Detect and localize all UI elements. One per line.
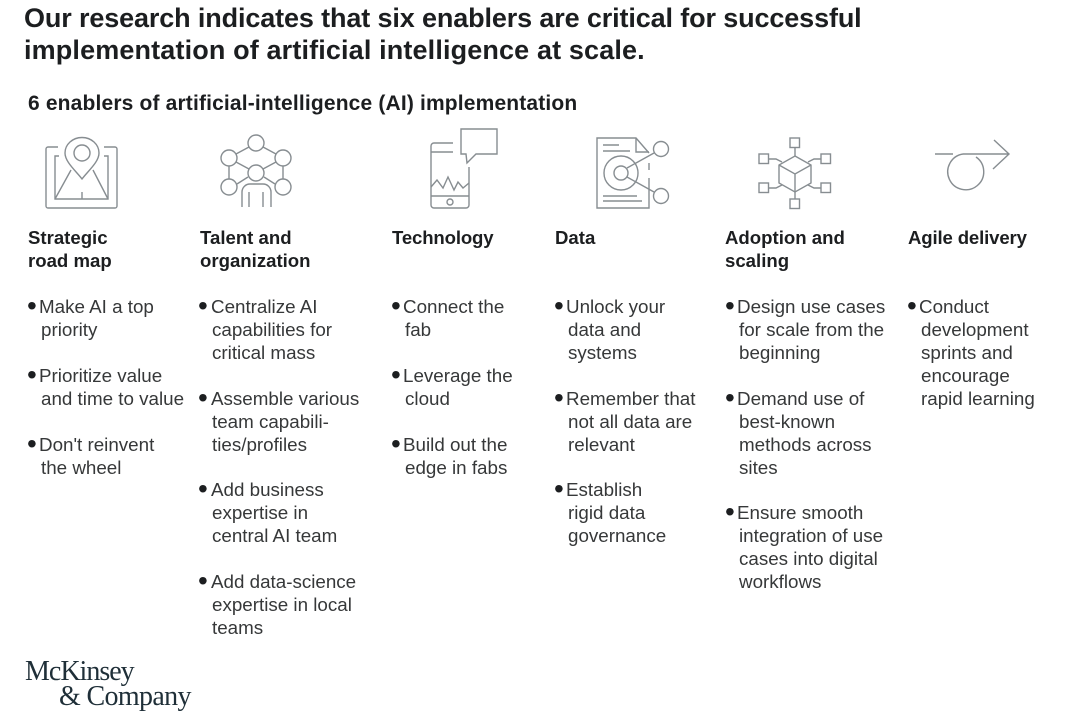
- column: data: [554, 227, 696, 546]
- column: adoption and scaling: [725, 227, 885, 592]
- subtitle: 6 enablers of artificial-intelligence (AI) implementation: [28, 92, 577, 115]
- heading: Technology: [392, 227, 493, 248]
- bullet: data and: [568, 319, 641, 340]
- bullet: Add data-science: [211, 571, 356, 592]
- bullet: encourage: [921, 365, 1010, 386]
- bullet: governance: [568, 525, 666, 546]
- bullet: Leverage the: [403, 365, 513, 386]
- bullet: •: [27, 359, 37, 390]
- bullet: Design use cases: [737, 296, 885, 317]
- bullet: edge in fabs: [405, 457, 507, 478]
- heading: Adoption and: [725, 227, 845, 248]
- icon: phone with chart and speech bubble: [431, 129, 497, 208]
- bullet: systems: [568, 342, 637, 363]
- bullet: fab: [405, 319, 431, 340]
- icon: map with pin: [46, 138, 117, 208]
- title: [24, 2, 862, 64]
- bullet: cases into digital: [739, 548, 878, 569]
- heading: Strategic: [28, 227, 108, 248]
- bullet: [198, 565, 356, 638]
- bullet: [198, 290, 332, 363]
- bullet: methods across: [739, 434, 872, 455]
- bullet: [198, 382, 359, 455]
- bullet: Build out the: [403, 434, 507, 455]
- bullet: Conduct: [919, 296, 989, 317]
- heading: Talent and: [200, 227, 292, 248]
- bullet: critical mass: [212, 342, 315, 363]
- bullet: development: [921, 319, 1029, 340]
- bullet: •: [198, 473, 208, 504]
- logo: [25, 656, 192, 712]
- bullet: •: [391, 290, 401, 321]
- bullet: and time to value: [41, 388, 184, 409]
- icon: talent network with person: [221, 135, 291, 207]
- bullet: [198, 473, 337, 546]
- bullet: expertise in: [212, 502, 308, 523]
- bullet: •: [725, 290, 735, 321]
- bullet: Prioritize value: [39, 365, 162, 386]
- bullet: •: [198, 382, 208, 413]
- heading: [200, 227, 311, 271]
- bullet: Ensure smooth: [737, 502, 863, 523]
- bullet: integration of use: [739, 525, 883, 546]
- bullet: Assemble various: [211, 388, 359, 409]
- bullet: [27, 290, 154, 340]
- heading: scaling: [725, 250, 789, 271]
- bullet: Establish: [566, 479, 642, 500]
- heading: [28, 227, 112, 271]
- bullet: teams: [212, 617, 263, 638]
- bullet: •: [907, 290, 917, 321]
- column: strategic road map: [27, 227, 184, 478]
- logo: McKinsey: [25, 656, 134, 687]
- bullet: •: [27, 290, 37, 321]
- column: agile delivery: [907, 227, 1035, 409]
- bullet: beginning: [739, 342, 820, 363]
- bullet: •: [554, 473, 564, 504]
- bullet: rigid data: [568, 502, 645, 523]
- bullet: [27, 359, 184, 409]
- bullet: •: [198, 290, 208, 321]
- bullet: •: [198, 565, 208, 596]
- bullet: •: [554, 382, 564, 413]
- bullet: Remember that: [566, 388, 695, 409]
- title: Our research indicates that six enablers are critical for successful: [24, 2, 862, 32]
- bullet: rapid learning: [921, 388, 1035, 409]
- bullet: •: [391, 428, 401, 459]
- bullet: [391, 428, 507, 478]
- bullet: not all data are: [568, 411, 692, 432]
- bullet: the wheel: [41, 457, 121, 478]
- bullet: •: [391, 359, 401, 390]
- bullet: for scale from the: [739, 319, 884, 340]
- bullet: best-known: [739, 411, 835, 432]
- bullet: [725, 290, 885, 363]
- column: technology: [391, 227, 513, 478]
- bullet: Unlock your: [566, 296, 665, 317]
- bullet: cloud: [405, 388, 450, 409]
- bullet: [725, 382, 872, 478]
- bullet: Centralize AI: [211, 296, 317, 317]
- heading: Agile delivery: [908, 227, 1027, 248]
- logo: & Company: [59, 681, 191, 712]
- bullet: [27, 428, 154, 478]
- bullet: [554, 382, 696, 455]
- icon: hexagonal cube with nodes: [759, 138, 830, 208]
- bullet: [907, 290, 1035, 409]
- column: talent and organization: [198, 227, 359, 638]
- icon: loop arrow: [935, 140, 1009, 190]
- bullet: [554, 473, 666, 546]
- title: implementation of artificial intelligence at scale.: [24, 34, 645, 64]
- bullet: central AI team: [212, 525, 337, 546]
- bullet: ties/profiles: [212, 434, 307, 455]
- bullet: team capabili-: [212, 411, 329, 432]
- heading: Data: [555, 227, 595, 248]
- bullet: Connect the: [403, 296, 504, 317]
- bullet: [554, 290, 665, 363]
- bullet: [391, 290, 504, 340]
- heading: organization: [200, 250, 311, 271]
- bullet: Make AI a top: [39, 296, 154, 317]
- bullet: workflows: [739, 571, 821, 592]
- bullet: Add business: [211, 479, 324, 500]
- bullet: [391, 359, 513, 409]
- bullet: •: [725, 496, 735, 527]
- bullet: •: [27, 428, 37, 459]
- bullet: •: [725, 382, 735, 413]
- bullet: priority: [41, 319, 97, 340]
- bullet: sites: [739, 457, 778, 478]
- bullet: Demand use of: [737, 388, 864, 409]
- heading: [725, 227, 845, 271]
- icon: document with target and nodes: [597, 138, 668, 208]
- bullet: expertise in local: [212, 594, 352, 615]
- heading: road map: [28, 250, 112, 271]
- bullet: sprints and: [921, 342, 1013, 363]
- bullet: Don't reinvent: [39, 434, 154, 455]
- bullet: capabilities for: [212, 319, 332, 340]
- bullet: [725, 496, 883, 592]
- bullet: relevant: [568, 434, 635, 455]
- bullet: •: [554, 290, 564, 321]
